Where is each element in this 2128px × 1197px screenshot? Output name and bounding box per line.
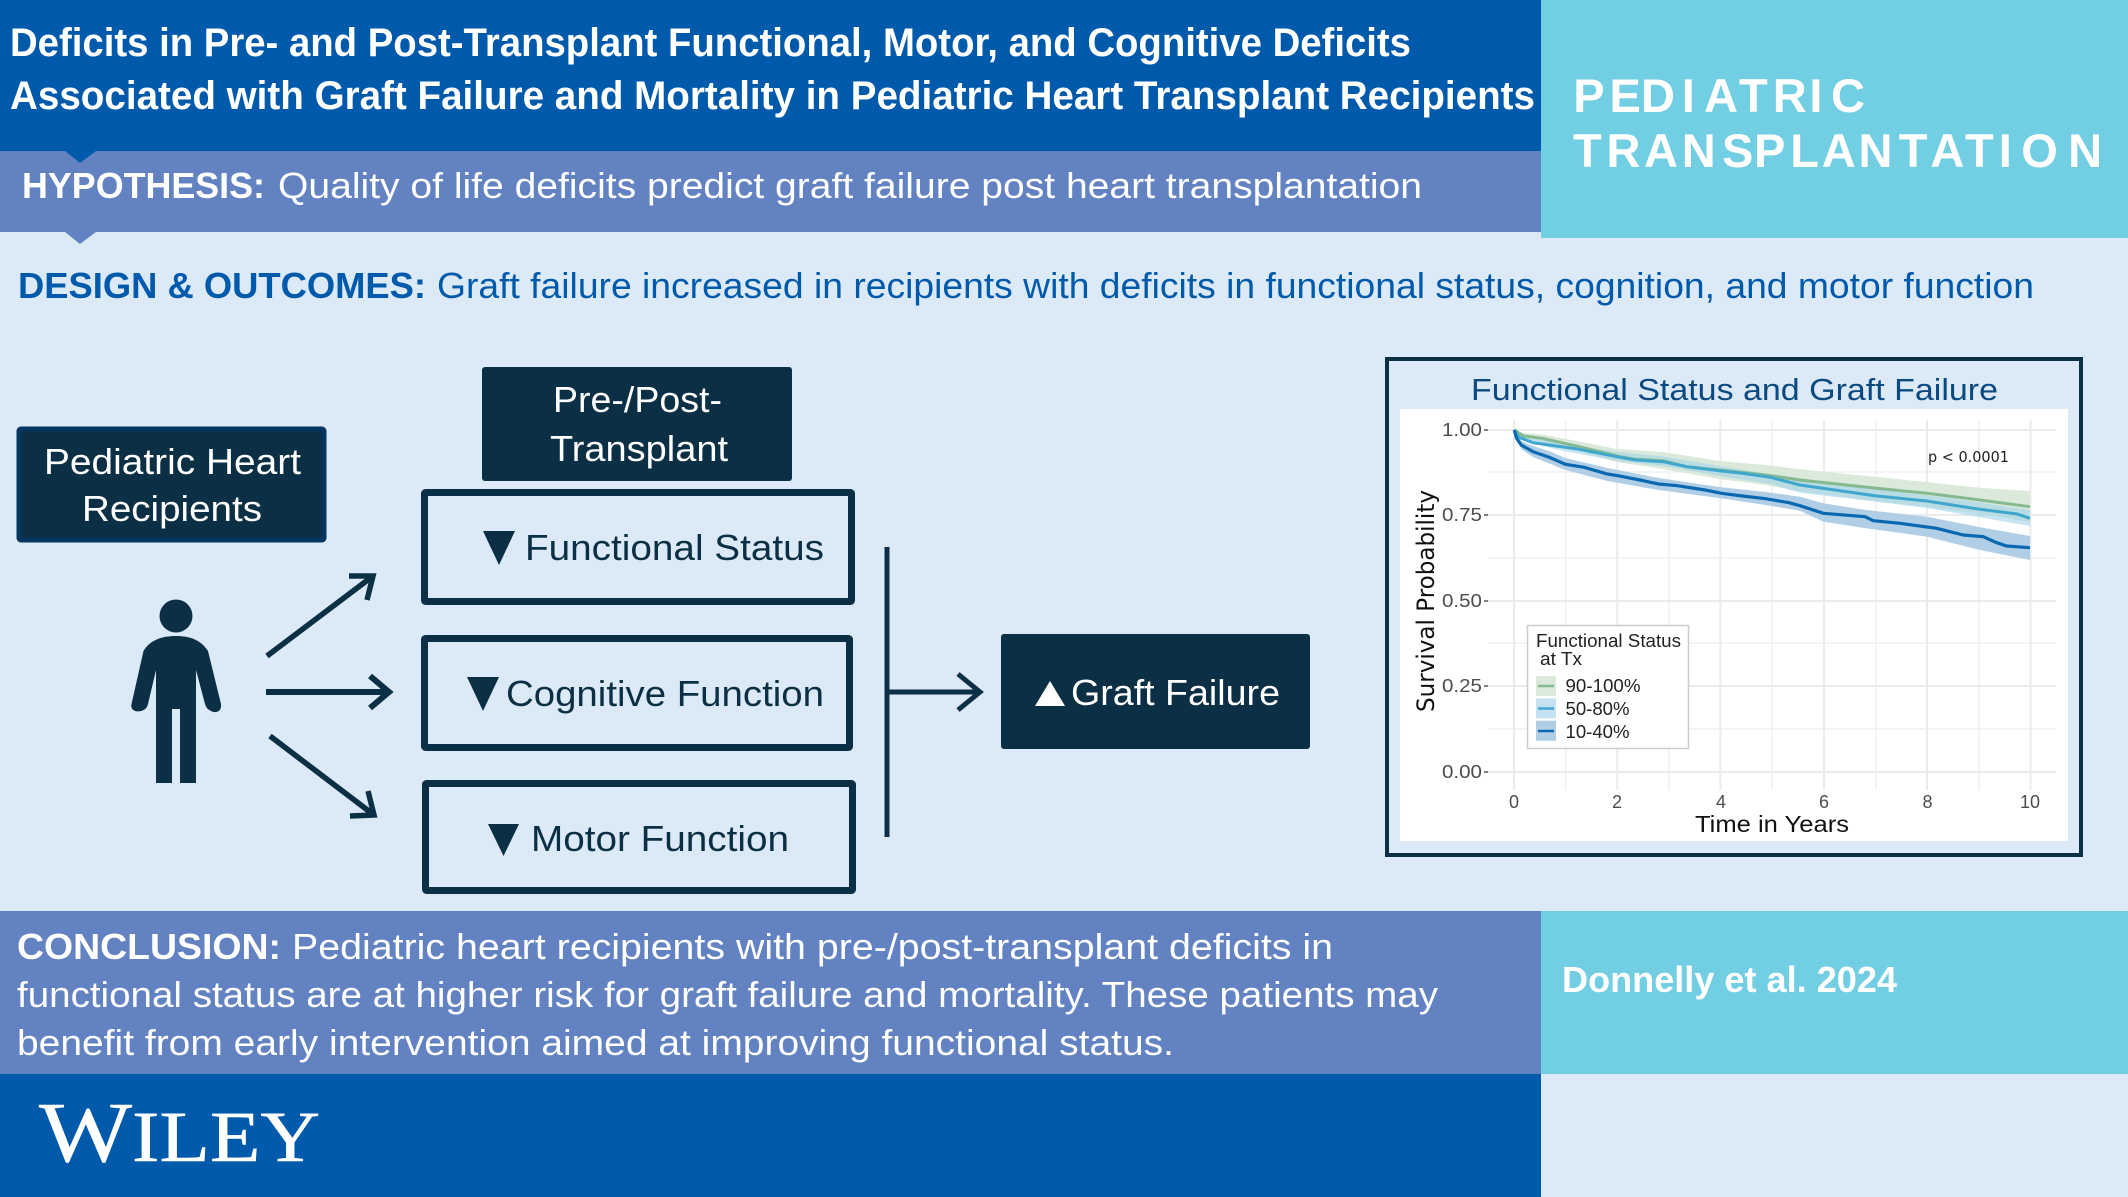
conclusion text: Pediatric heart recipients with pre-/post-transplant deficits in <box>292 926 1333 967</box>
x axis ticks: 4 <box>1716 792 1726 812</box>
box: motor function <box>426 784 852 890</box>
panel: title banner <box>0 0 1541 151</box>
x axis ticks: 2 <box>1612 792 1622 812</box>
box: graft failure: Graft Failure <box>1071 672 1280 713</box>
panel: citation: Donnelly et al. 2024 <box>1562 959 1897 1000</box>
box: pre-/post-transplant: Pre-/Post- <box>553 379 722 420</box>
conclusion text: benefit from early intervention aimed at improving functional status. <box>17 1022 1174 1063</box>
hypothesis text: HYPOTHESIS: <box>22 165 265 206</box>
x axis ticks: 8 <box>1922 792 1933 812</box>
y axis ticks: 0.25 <box>1442 676 1482 696</box>
x axis label: Time in Years <box>1695 811 1849 837</box>
y axis ticks: 0.75 <box>1442 505 1482 525</box>
journal title: TRANSPLANTATION <box>1573 124 2102 177</box>
box: cognitive function: Cognitive Function <box>506 673 824 714</box>
legend: 10-40% <box>1566 722 1630 742</box>
box: functional status: Functional Status <box>525 527 824 568</box>
y axis ticks <box>1442 420 1488 782</box>
panel: conclusion <box>0 911 1541 1074</box>
box: functional status <box>424 492 852 602</box>
y axis label: Survival Probability <box>1412 490 1440 712</box>
chart title: Functional Status and Graft Failure <box>1471 372 1998 407</box>
box: pediatric heart recipients <box>19 429 324 540</box>
panel: hypothesis <box>0 151 1541 244</box>
title: Deficits in Pre- and Post-Transplant Functional, Motor, and Cognitive Deficits <box>10 21 1411 65</box>
conclusion text: functional status are at higher risk for graft failure and mortality. These patients may <box>17 974 1438 1015</box>
box: pediatric heart recipients: Pediatric Heart <box>44 441 301 482</box>
x axis ticks <box>1509 792 2040 812</box>
conclusion text <box>17 926 1438 1063</box>
wiley logo: WILEY <box>39 1084 320 1180</box>
bracket and arrow to graft failure <box>885 547 980 837</box>
panel: survival chart <box>1387 359 2081 855</box>
box: motor function: Motor Function <box>531 818 789 859</box>
x axis ticks: 6 <box>1819 792 1829 812</box>
icon: person <box>131 600 221 783</box>
journal title <box>1573 69 2102 177</box>
legend: at Tx <box>1540 649 1582 669</box>
arrow: to cognitive function <box>266 676 389 708</box>
conclusion text: CONCLUSION: <box>17 926 281 967</box>
box: graft failure <box>1001 634 1310 749</box>
box: pediatric heart recipients: Recipients <box>82 488 262 529</box>
x axis ticks: 10 <box>2020 792 2040 812</box>
y axis ticks: 0.50 <box>1442 591 1482 611</box>
title: Associated with Graft Failure and Mortality in Pediatric Heart Transplant Recipients <box>10 74 1535 118</box>
box: pre-/post-transplant: Transplant <box>550 428 728 469</box>
x axis ticks: 0 <box>1509 792 1519 812</box>
confidence bands and survival curves <box>1514 430 2030 560</box>
panel: citation <box>1541 911 2128 1074</box>
box: cognitive function <box>424 638 850 748</box>
design and outcomes text: DESIGN & OUTCOMES: <box>18 265 426 306</box>
hypothesis text: Quality of life deficits predict graft failure post heart transplantation <box>278 165 1422 206</box>
y axis ticks: 1.00 <box>1442 420 1482 440</box>
arrow: to functional status <box>267 576 373 656</box>
y axis ticks: 0.00 <box>1442 762 1482 782</box>
title <box>10 21 1535 118</box>
journal title: PEDIATRIC <box>1573 69 1865 122</box>
design and outcomes text: Graft failure increased in recipients with deficits in functional status, cognition, and motor function <box>437 265 2034 306</box>
legend: 50-80% <box>1566 699 1630 719</box>
panel: journal name <box>1541 0 2128 238</box>
arrow: to motor function <box>270 736 374 816</box>
legend: Functional Status <box>1536 631 1681 651</box>
box: pre-/post-transplant <box>482 367 792 481</box>
legend: 90-100% <box>1566 676 1640 696</box>
p value: p < 0.0001 <box>1928 448 2009 466</box>
panel: publisher footer <box>0 1074 1541 1197</box>
legend <box>1528 626 1688 748</box>
